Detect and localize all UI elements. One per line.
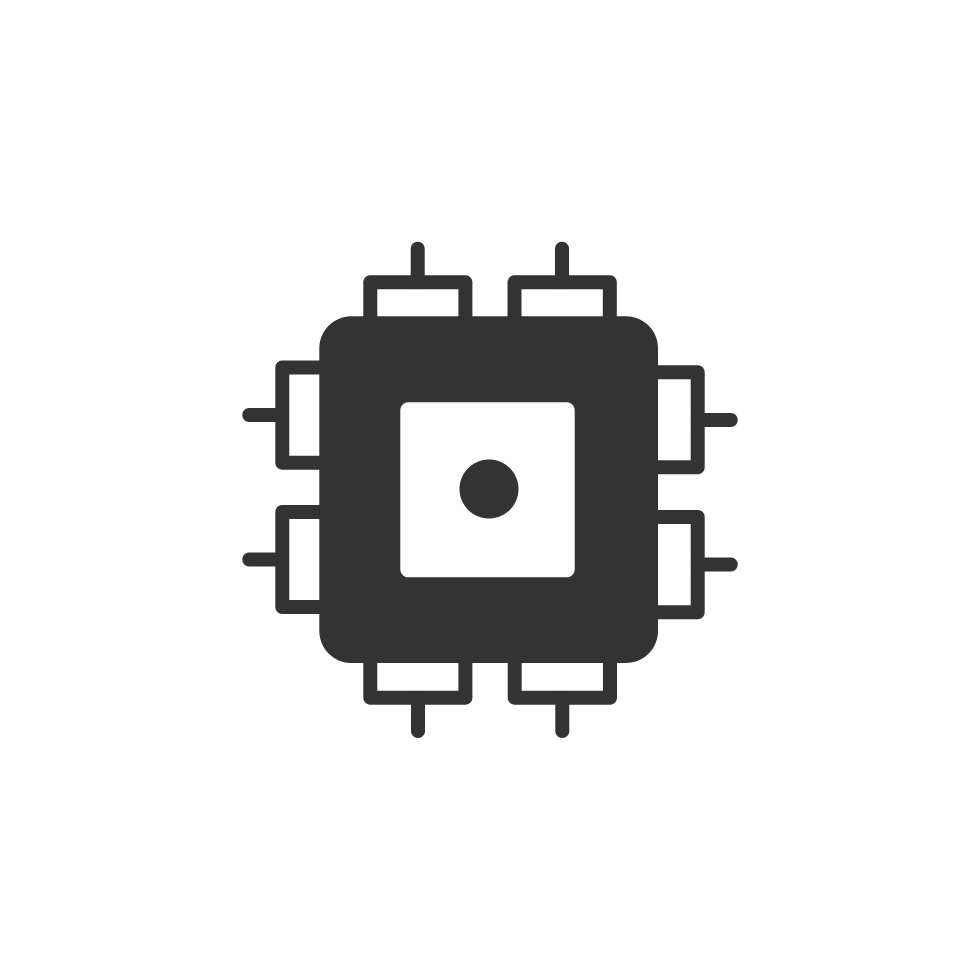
center dot bbox=[460, 460, 518, 518]
right upper pin bbox=[650, 372, 731, 467]
left upper pin bbox=[249, 368, 325, 463]
top right pin bbox=[514, 249, 610, 325]
right lower pin bbox=[650, 517, 731, 612]
left lower pin bbox=[249, 512, 325, 607]
bottom right pin bbox=[515, 655, 610, 731]
bottom left pin bbox=[370, 655, 465, 731]
chip body bbox=[319, 316, 658, 663]
inner die square bbox=[400, 402, 575, 577]
top left pin bbox=[370, 249, 465, 325]
